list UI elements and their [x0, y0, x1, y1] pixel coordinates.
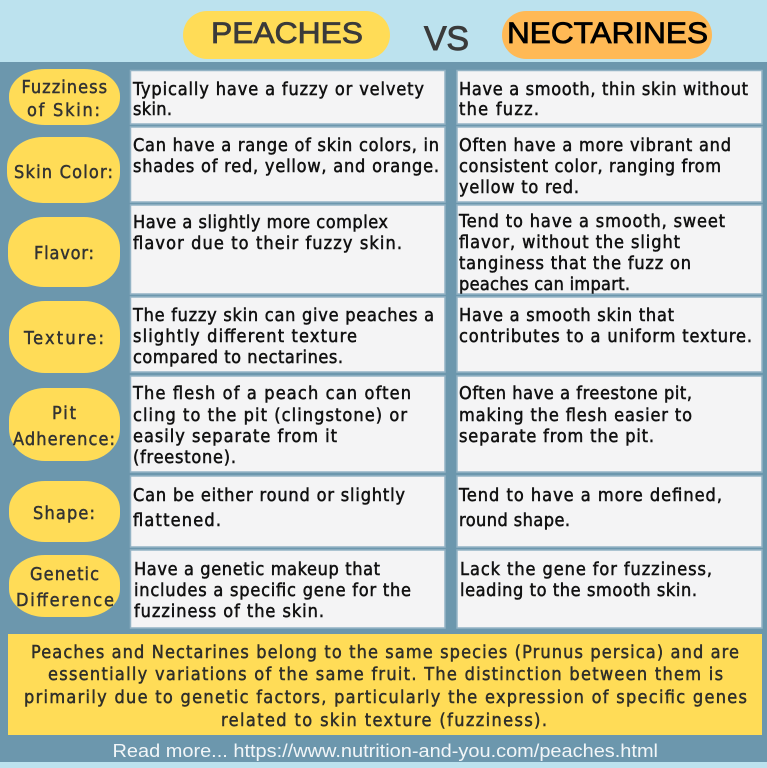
nectarine cell: texture: Have a smooth skin that	[459, 305, 674, 326]
nectarine cell: genetic difference: Lack the gene for fuzziness,	[460, 559, 712, 580]
peach cell: pit adherence	[130, 376, 445, 472]
title: peaches: PEACHES	[211, 17, 363, 50]
peach cell: pit adherence: easily separate from it	[133, 426, 337, 447]
label: genetic difference: Genetic	[30, 564, 99, 585]
label: flavor: Flavor:	[34, 243, 94, 264]
summary panel: Peaches and Nectarines belong to the same species (Prunus persica) and are	[31, 642, 739, 663]
row: flavor	[8, 205, 762, 295]
label: fuzziness of skin	[9, 69, 120, 125]
nectarine cell: skin color: Often have a more vibrant and	[459, 135, 731, 156]
nectarine cell: fuzziness	[457, 70, 762, 124]
nectarine cell: skin color: yellow to red.	[459, 177, 579, 198]
peach cell: texture	[130, 297, 445, 372]
peach cell: genetic difference: Have a genetic makeup that	[134, 559, 380, 580]
nectarine cell: flavor: tanginess that the fuzz on	[459, 253, 691, 274]
label: skin color: Skin Color:	[14, 162, 113, 183]
nectarine cell: fuzziness: the fuzz.	[459, 99, 539, 120]
nectarine cell: pit adherence: making the flesh easier to	[459, 405, 692, 426]
title: vs: VS	[424, 20, 469, 58]
label: fuzziness of skin: of Skin:	[27, 100, 100, 121]
row: skin color	[7, 127, 762, 203]
label: shape	[9, 481, 120, 542]
nectarine cell: texture: contributes to a uniform texture.	[459, 326, 752, 347]
label: pit adherence: Pit	[52, 403, 76, 424]
peach cell: pit adherence: cling to the pit (clingstone) or	[133, 405, 407, 426]
peach cell: fuzziness	[130, 70, 445, 124]
nectarine cell: skin color	[457, 127, 762, 202]
label: fuzziness of skin: Fuzziness	[22, 77, 107, 98]
peach cell: fuzziness: Typically have a fuzzy or velvety	[132, 79, 424, 100]
title: peaches	[183, 11, 390, 59]
nectarine cell: pit adherence: Often have a freestone pit,	[459, 383, 692, 404]
footer link: Read more... https://www.nutrition-and-you.com/peaches.html	[112, 741, 658, 761]
peach cell: skin color: shades of red, yellow, and orange.	[133, 156, 439, 177]
label: shape: Shape:	[33, 503, 95, 524]
peach cell: shape: Can be either round or slightly	[133, 485, 405, 506]
title: nectarines: NECTARINES	[507, 17, 708, 50]
label: genetic difference	[9, 555, 120, 617]
nectarine cell: flavor	[457, 205, 762, 295]
nectarine cell: pit adherence	[457, 376, 762, 472]
peach cell: flavor: Have a slightly more complex	[133, 212, 388, 233]
nectarine cell: flavor: flavor, without the slight	[459, 232, 680, 253]
nectarine cell: genetic difference: leading to the smooth skin.	[460, 580, 697, 601]
label: flavor	[8, 217, 120, 287]
peach cell: fuzziness: skin.	[133, 99, 172, 120]
label: genetic difference: Difference	[16, 590, 114, 611]
peach cell: skin color: Can have a range of skin colors, in	[133, 135, 439, 156]
nectarine cell: shape: round shape.	[459, 510, 570, 531]
nectarine cell: pit adherence: separate from the pit.	[459, 426, 654, 447]
nectarine cell: texture	[457, 297, 762, 372]
label: pit adherence	[9, 388, 120, 461]
peach cell: shape: flattened.	[133, 510, 221, 531]
summary panel: related to skin texture (fuzziness).	[221, 710, 547, 731]
peach cell: texture: compared to nectarines.	[133, 347, 343, 368]
peach cell: texture: The fuzzy skin can give peaches a	[132, 305, 434, 326]
row: fuzziness of skin	[9, 69, 762, 125]
nectarine cell: shape: Tend to have a more defined,	[458, 485, 722, 506]
label: texture	[9, 301, 120, 373]
row: pit adherence	[9, 376, 762, 472]
title: nectarines	[502, 11, 712, 59]
summary panel: essentially variations of the same fruit. The distinction between them is	[48, 664, 723, 685]
peach cell: shape	[130, 476, 445, 547]
peach cell: flavor	[130, 205, 445, 294]
summary panel: primarily due to genetic factors, particularly the expression of specific genes	[24, 687, 747, 708]
peach cell: pit adherence: (freestone).	[133, 447, 236, 468]
peach cell: genetic difference: includes a specific gene for the	[134, 580, 411, 601]
peach cell: texture: slightly different texture	[133, 326, 357, 347]
row: texture	[9, 297, 762, 373]
nectarine cell: genetic difference	[457, 550, 762, 628]
nectarine cell: flavor: peaches can impart.	[459, 274, 630, 295]
peach cell: skin color	[130, 127, 445, 202]
nectarine cell: flavor: Tend to have a smooth, sweet	[458, 211, 725, 232]
label: skin color	[7, 137, 120, 203]
nectarine cell: shape	[457, 476, 762, 547]
peach cell: flavor: flavor due to their fuzzy skin.	[133, 233, 402, 254]
label: texture: Texture:	[23, 328, 104, 349]
peach cell: genetic difference: fuzziness of the skin.	[134, 601, 324, 622]
peach cell: pit adherence: The flesh of a peach can often	[132, 383, 411, 404]
nectarine cell: fuzziness: Have a smooth, thin skin without	[459, 79, 748, 100]
row: genetic difference	[9, 550, 762, 628]
label: pit adherence: Adherence:	[13, 429, 115, 450]
peach cell: genetic difference	[130, 550, 445, 628]
row: shape	[9, 476, 762, 547]
summary panel	[8, 634, 762, 735]
nectarine cell: skin color: consistent color, ranging from	[459, 156, 721, 177]
